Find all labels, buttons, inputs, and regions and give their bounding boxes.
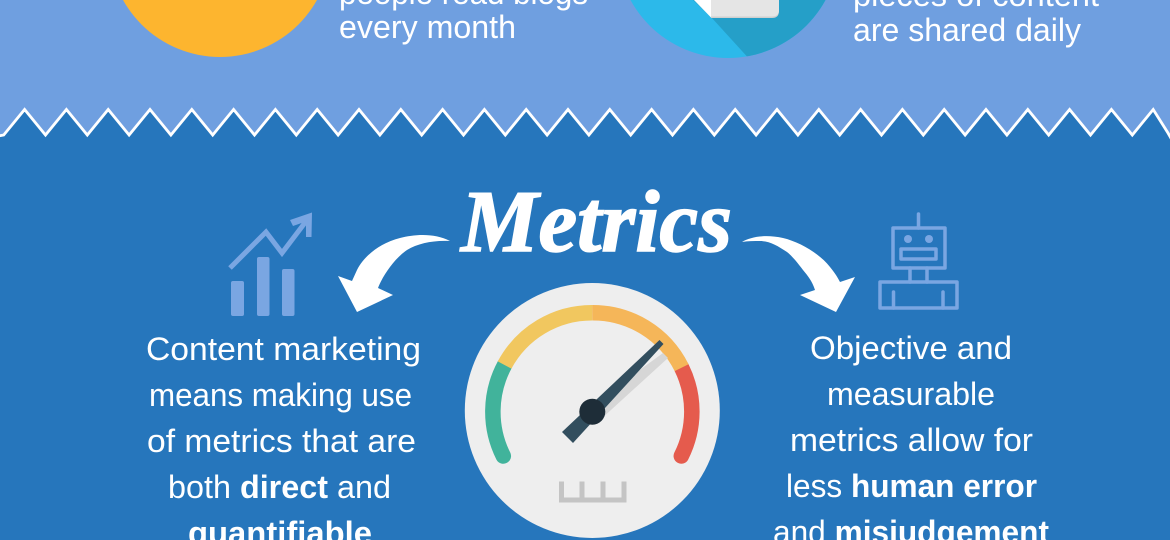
needle shadow bbox=[588, 353, 668, 420]
icon: bar chart with rising arrow bbox=[230, 212, 312, 316]
text: right paragraph: Objective and bbox=[810, 330, 1012, 366]
icon: robot bbox=[880, 214, 957, 308]
text: people read blogs: every month bbox=[339, 9, 516, 45]
chart: speedometer gauge bbox=[465, 283, 720, 538]
text: left paragraph: of metrics that are bbox=[147, 423, 416, 459]
text: right paragraph bbox=[773, 330, 1049, 540]
text: left paragraph: Content marketing bbox=[146, 331, 421, 367]
gauge green arc bbox=[493, 365, 505, 456]
text: pieces of content: are shared daily bbox=[853, 12, 1082, 48]
arrow: curved right bbox=[742, 236, 855, 312]
panel: bottom dark blue band with zigzag edge bbox=[0, 110, 1170, 540]
title: Metrics: Metrics bbox=[459, 174, 732, 271]
arrow: curved left bbox=[338, 235, 450, 312]
text: right paragraph: metrics allow for bbox=[790, 422, 1033, 458]
text: people read blogs bbox=[339, 0, 588, 45]
text: right paragraph: measurable bbox=[827, 376, 995, 412]
ruler mark bbox=[562, 482, 624, 500]
panel: top light blue band bbox=[0, 0, 1170, 140]
gauge orange arc bbox=[592, 313, 682, 368]
text: left paragraph: both direct and bbox=[168, 469, 391, 505]
needle hub bbox=[579, 399, 605, 425]
icon: yellow circle bbox=[109, 0, 331, 57]
gauge yellow arc bbox=[505, 313, 592, 365]
text: left paragraph bbox=[146, 331, 421, 540]
text: right paragraph: less human error bbox=[786, 468, 1037, 504]
needle bbox=[562, 340, 664, 443]
icon: blue circle with document bbox=[630, 0, 826, 58]
text: left paragraph: means making use bbox=[149, 377, 412, 413]
gauge red arc bbox=[681, 368, 692, 456]
